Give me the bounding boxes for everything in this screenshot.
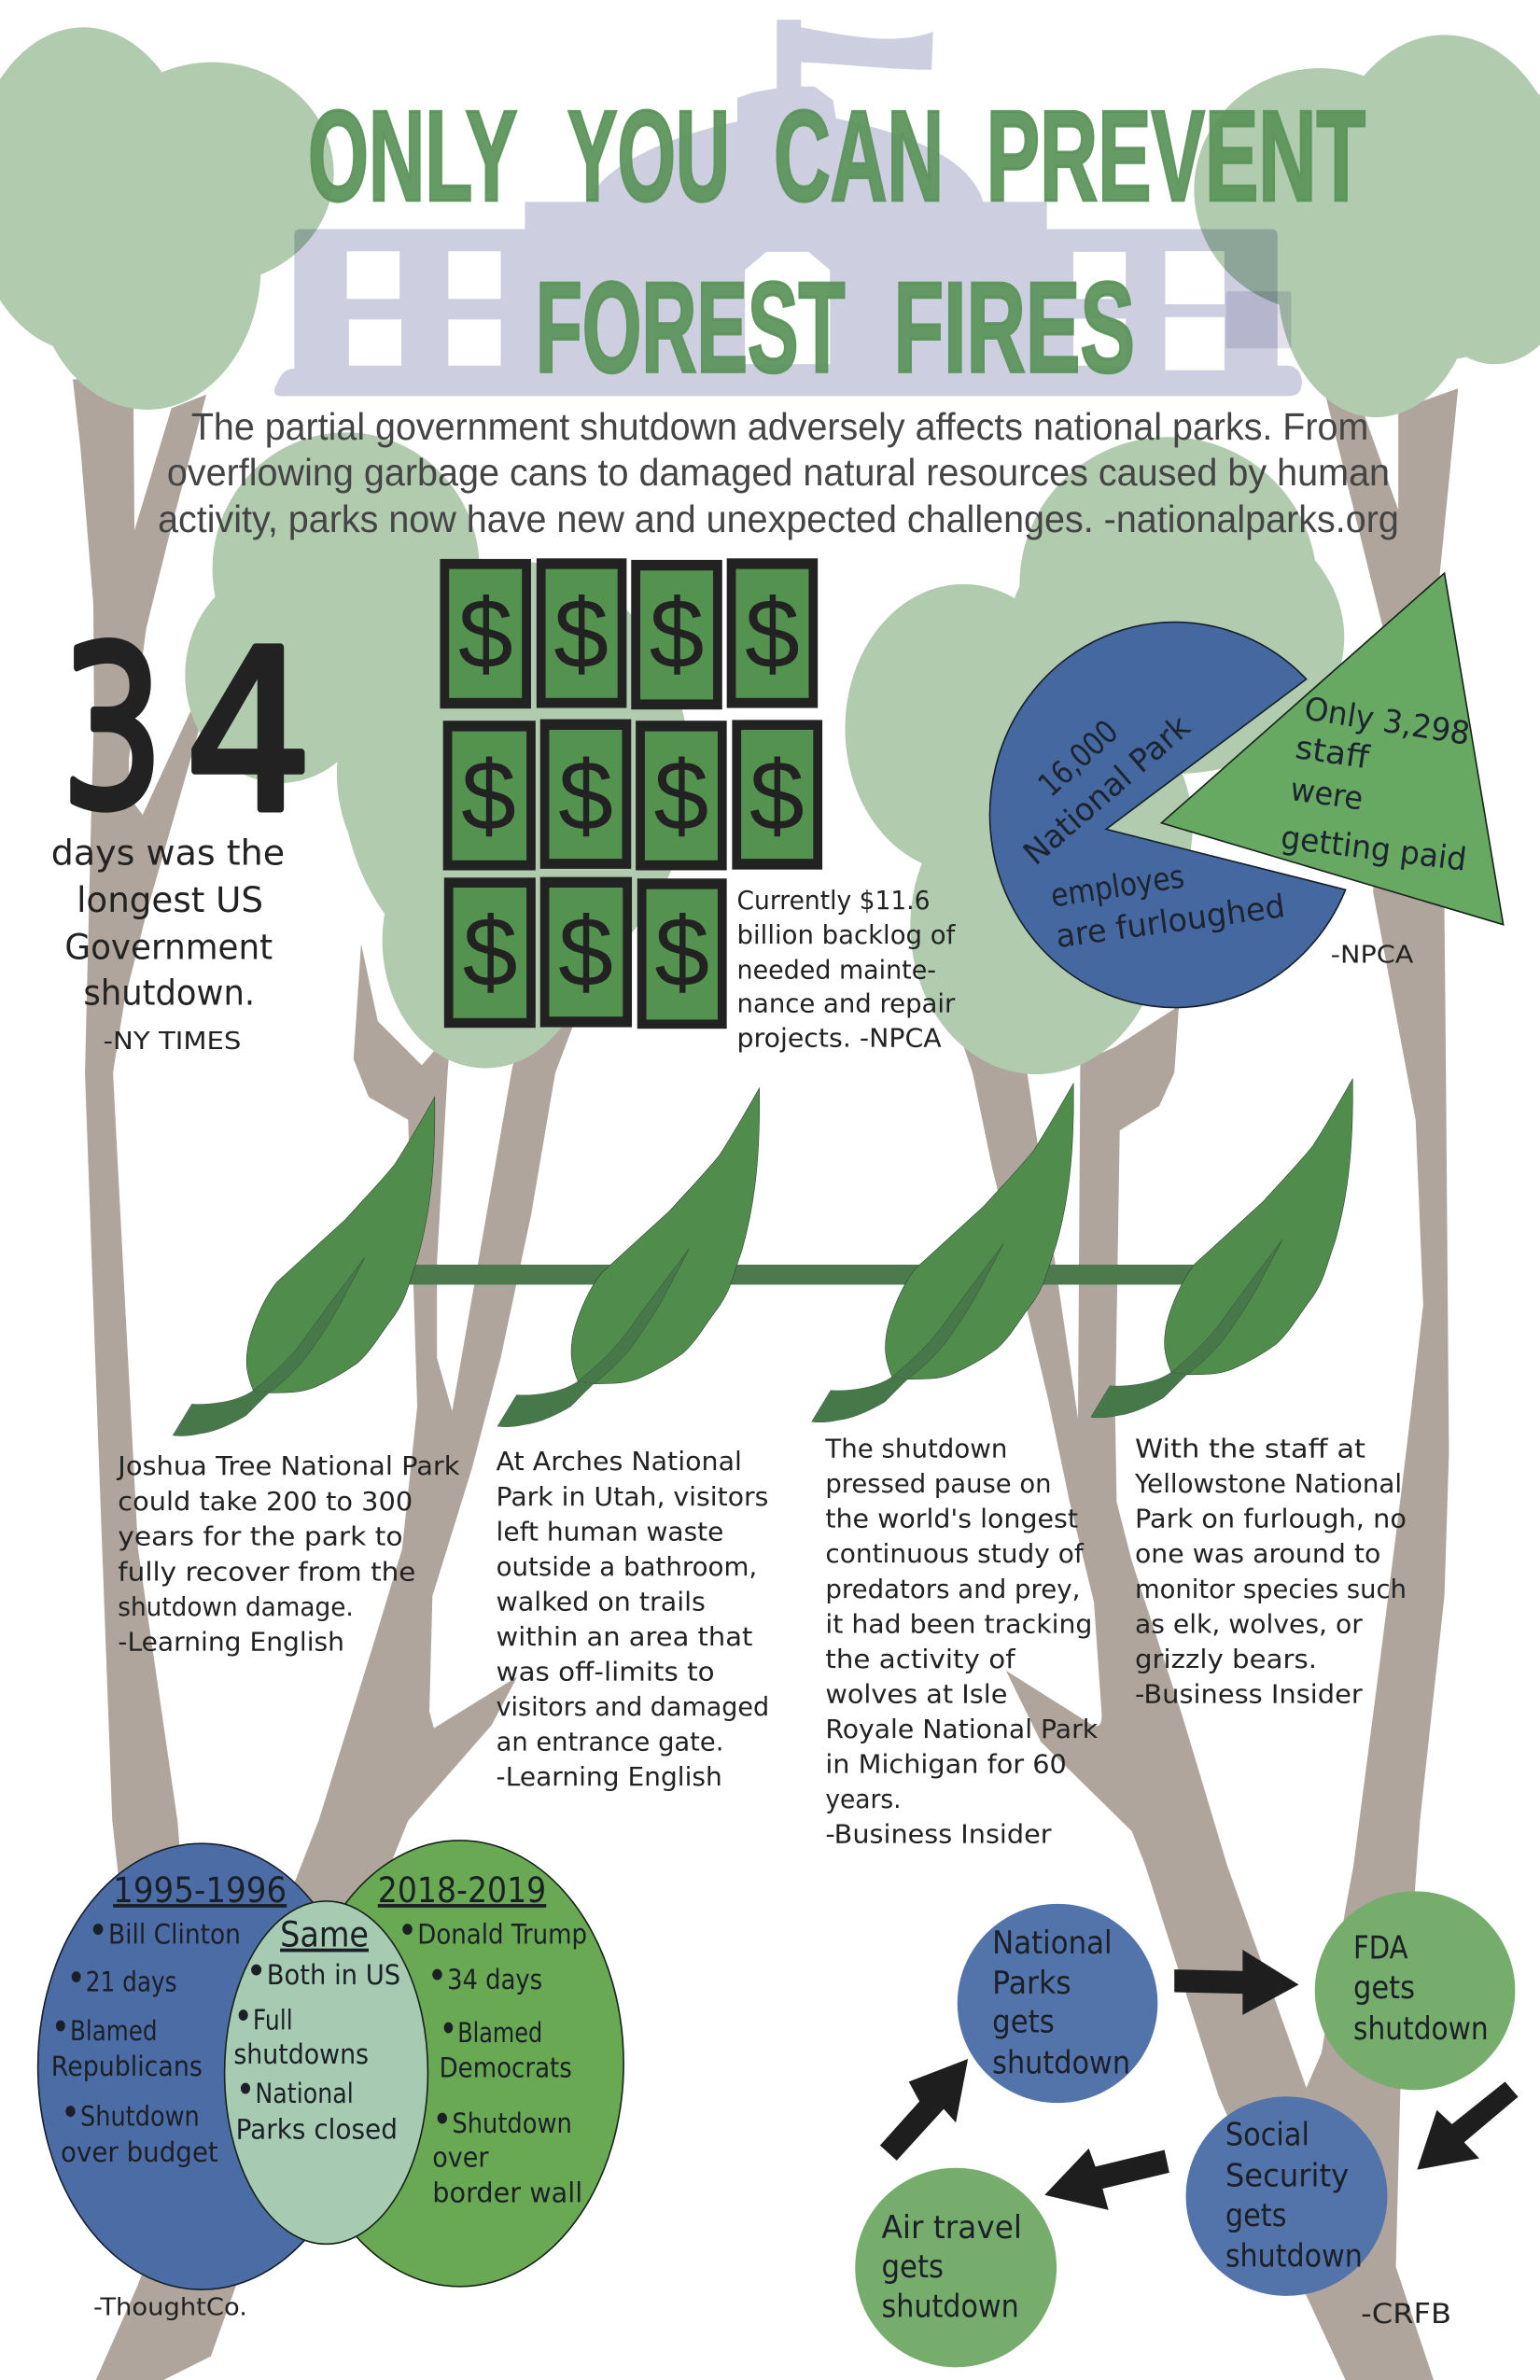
text: Joshua Tree: shutdown damage. — [118, 1591, 354, 1622]
stat caption — [51, 833, 285, 1014]
venn text: 2018-2019: •Donald Trump — [398, 1908, 587, 1953]
node: Air travel: shutdown — [881, 2288, 1019, 2325]
node: Air travel: gets — [881, 2248, 944, 2286]
text: Joshua Tree: years for the park to — [118, 1521, 403, 1552]
arrow: parks to FDA — [1174, 1950, 1299, 2015]
pie label: paid: were — [1288, 771, 1365, 819]
pie label: furloughed: employes — [1048, 858, 1187, 916]
trunk: middle-left tree — [95, 944, 577, 2380]
bill row 3: $ — [558, 898, 613, 1008]
white house silhouette — [274, 20, 1302, 396]
text: Arches: an entrance gate. — [497, 1727, 723, 1757]
backlog caption: nance and repair — [737, 987, 956, 1018]
text: Joshua Tree — [116, 1450, 460, 1658]
pie chart: furloughed staff — [990, 573, 1504, 1008]
intro paragraph — [158, 405, 1399, 540]
foliage: middle-left tree — [185, 432, 691, 1068]
tree trunks — [73, 379, 1458, 2380]
backlog caption — [737, 885, 957, 1054]
venn text: same: •Both in US — [245, 1949, 400, 1994]
text: Isle Royale: the world's longest — [825, 1504, 1078, 1534]
text: Arches: walked on trails — [497, 1586, 706, 1617]
backlog caption: needed mainte- — [737, 955, 936, 986]
title: YOU — [567, 85, 730, 229]
venn circle: 1995-1996 — [38, 1843, 366, 2289]
text: Arches — [497, 1446, 769, 1792]
source: ThoughtCo: -ThoughtCo. — [93, 2294, 247, 2322]
leaf 2 — [497, 1088, 760, 1427]
text: Isle Royale: pressed pause on — [825, 1468, 1052, 1499]
pie label: furloughed — [1016, 708, 1287, 956]
backlog caption: billion backlog of — [737, 919, 957, 950]
bill row 1: $ — [458, 579, 513, 689]
venn text: same: Parks closed — [236, 2113, 398, 2145]
source: CRFB: -CRFB — [1361, 2298, 1451, 2330]
text: Yellowstone: grizzly bears. — [1135, 1644, 1317, 1674]
venn circle: same — [225, 1901, 427, 2244]
bill row 2: $ — [654, 741, 708, 851]
foliage: top-left tree — [0, 27, 334, 410]
text: Arches: was off-limits to — [497, 1657, 715, 1687]
text: Joshua Tree: could take 200 to 300 — [118, 1486, 413, 1517]
stat caption: longest US — [77, 879, 263, 920]
venn text: same: •National — [236, 2067, 354, 2112]
intro paragraph: activity, parks now have new and unexpected challenges. -nationalparks.org — [158, 497, 1399, 540]
venn text: 2018-2019: border wall — [432, 2177, 582, 2208]
text: Isle Royale: years. — [825, 1784, 902, 1814]
node: National Parks: Parks — [992, 1965, 1071, 2002]
dollar bills grid — [440, 558, 822, 1029]
text: Yellowstone: monitor species such — [1135, 1574, 1407, 1604]
venn text: same: •Full — [233, 1995, 293, 2039]
bill row 2 — [443, 720, 822, 870]
node: Social Security: Social — [1225, 2117, 1309, 2154]
text: Arches: Park in Utah, visitors — [497, 1481, 768, 1512]
text: Isle Royale — [824, 1434, 1098, 1850]
pie label: furloughed: National Park — [1016, 708, 1197, 873]
backlog caption: projects. -NPCA — [737, 1023, 942, 1054]
node: Social Security: shutdown — [1225, 2238, 1363, 2275]
arrow: social security to air travel — [1044, 2149, 1169, 2210]
bill row 3 — [444, 877, 727, 1029]
text: Isle Royale: the activity of — [825, 1644, 1016, 1674]
text: Yellowstone: as elk, wolves, or — [1135, 1608, 1363, 1639]
big number 34: 4 — [185, 603, 313, 861]
text: Joshua Tree: fully recover from the — [118, 1556, 415, 1587]
leaf 1 — [173, 1097, 435, 1435]
venn text: 2018-2019: •34 days — [427, 1953, 542, 1998]
venn text: 1995-1996: over budget — [61, 2136, 218, 2168]
text: Isle Royale: Royale National Park — [825, 1714, 1098, 1744]
leaf 4 — [1091, 1079, 1352, 1418]
text: Arches: outside a bathroom, — [497, 1551, 757, 1582]
node: FDA: gets — [1353, 1969, 1415, 2007]
venn text: 2018-2019 — [378, 1869, 587, 2208]
big number 34: 3 — [61, 600, 164, 858]
text: Arches: within an area that — [497, 1621, 752, 1652]
text: Isle Royale: wolves at Isle — [825, 1678, 1007, 1709]
node: National Parks: gets — [992, 2004, 1055, 2041]
stat caption: days was the — [51, 833, 285, 874]
node: Air travel — [855, 2168, 1057, 2367]
text: Joshua Tree: Joshua Tree National Park — [116, 1450, 460, 1481]
bill row 2: $ — [461, 741, 516, 851]
source: NY Times: -NY TIMES — [104, 1028, 241, 1056]
venn text: same — [233, 1914, 400, 2145]
stat: 34 days — [51, 600, 313, 1056]
backlog caption: Currently $11.6 — [737, 885, 931, 916]
node: FDA: FDA — [1353, 1930, 1408, 1967]
intro paragraph: The partial government shutdown adversely affects national parks. From — [191, 405, 1368, 448]
node: FDA: shutdown — [1353, 2010, 1489, 2048]
node: National Parks — [958, 1904, 1157, 2103]
foliage: middle-right tree — [845, 437, 1344, 1074]
text: Isle Royale: -Business Insider — [825, 1819, 1052, 1850]
node: Social Security: Security — [1225, 2158, 1349, 2195]
pie label: paid: getting paid — [1279, 819, 1468, 879]
text: Isle Royale: continuous study of — [825, 1538, 1085, 1569]
branch bar linking leaves — [408, 1265, 1198, 1284]
text: Yellowstone — [1134, 1434, 1407, 1709]
venn text: 1995-1996: 1995-1996 — [113, 1869, 287, 1911]
text: Isle Royale: it had been tracking — [825, 1608, 1092, 1639]
text: Arches: visitors and damaged — [497, 1691, 769, 1722]
big number 34 — [61, 600, 313, 861]
text: Isle Royale: predators and prey, — [825, 1574, 1080, 1604]
pie label: paid — [1279, 690, 1473, 879]
text: Isle Royale: in Michigan for 60 — [825, 1749, 1067, 1780]
title: ONLY — [308, 85, 517, 229]
venn text: 1995-1996: •Shutdown — [61, 2091, 200, 2135]
text: Yellowstone: With the staff at — [1135, 1434, 1365, 1464]
node: Social Security: gets — [1225, 2197, 1287, 2234]
title — [308, 85, 1365, 399]
node: National Parks: National — [992, 1925, 1113, 1962]
text: Arches: -Learning English — [497, 1761, 722, 1792]
text: Yellowstone: one was around to — [1135, 1538, 1380, 1569]
trunk: middle-right tree — [948, 1001, 1434, 2380]
venn text: 2018-2019: Democrats — [440, 2051, 572, 2083]
bill row 1: $ — [745, 579, 800, 689]
node: National Parks: shutdown — [992, 2045, 1130, 2082]
pie label: furloughed: are furloughed — [1054, 888, 1287, 956]
house: tinted square — [1225, 291, 1291, 348]
venn text: 1995-1996: •21 days — [67, 1956, 177, 2001]
cycle diagram: shutdown effects — [855, 1891, 1519, 2367]
venn text: same: shutdowns — [233, 2038, 369, 2070]
pie: furloughed slice — [990, 623, 1346, 1008]
leaf 3 — [812, 1084, 1073, 1422]
title: FIRES — [893, 256, 1135, 399]
pie: paid slice — [1161, 573, 1504, 925]
venn text: 1995-1996: •Blamed — [51, 2005, 158, 2050]
bill row 3: $ — [463, 898, 517, 1008]
node: Air travel: Air travel — [881, 2209, 1022, 2247]
bill row 1 — [440, 558, 818, 709]
tree foliage — [0, 27, 1540, 1074]
bill row 2: $ — [749, 741, 805, 851]
arrow: FDA to social security — [1417, 2081, 1519, 2170]
text: Arches: At Arches National — [497, 1446, 742, 1477]
venn text: 1995-1996: Republicans — [51, 2051, 203, 2082]
text: Yellowstone: Park on furlough, no — [1135, 1504, 1407, 1534]
venn text: 1995-1996: •Bill Clinton — [88, 1908, 241, 1953]
text: Arches: left human waste — [497, 1516, 723, 1547]
text: Isle Royale: The shutdown — [824, 1434, 1007, 1464]
stat caption: shutdown. — [83, 973, 255, 1014]
trunk: right tree — [1307, 388, 1458, 2296]
title: FOREST — [536, 256, 845, 399]
venn text: 1995-1996 — [51, 1869, 287, 2168]
bill row 1: $ — [650, 579, 704, 689]
node: FDA — [1315, 1891, 1515, 2090]
source: NPCA: -NPCA — [1331, 942, 1414, 970]
venn diagram: shutdown comparison — [38, 1841, 623, 2322]
bill row 3: $ — [654, 898, 709, 1008]
venn text: 2018-2019: •Blamed — [440, 2007, 542, 2051]
venn text: 2018-2019: 2018-2019 — [378, 1869, 546, 1911]
venn text: same: Same — [280, 1914, 369, 1955]
bill row 1: $ — [553, 579, 609, 689]
foliage: top-right tree — [1194, 35, 1540, 417]
trunk: left tree — [73, 379, 213, 1972]
venn circle: 2018-2019 — [296, 1841, 623, 2287]
text: Yellowstone: -Business Insider — [1135, 1678, 1363, 1709]
bill row 2: $ — [558, 741, 613, 851]
pie label: paid: staff — [1293, 729, 1373, 777]
stat caption: Government — [64, 926, 273, 967]
intro paragraph: overflowing garbage cans to damaged natural resources caused by human — [167, 451, 1390, 494]
node: Social Security — [1186, 2096, 1387, 2296]
venn text: 2018-2019: •Shutdown — [432, 2097, 572, 2142]
arrow: air travel to parks — [880, 2059, 968, 2161]
text: Yellowstone: Yellowstone National — [1134, 1468, 1402, 1499]
pie label: paid: Only 3,298 — [1302, 690, 1473, 753]
venn text: 2018-2019: over — [432, 2141, 489, 2173]
text: Joshua Tree: -Learning English — [118, 1627, 344, 1658]
pie label: furloughed: 16,000 — [1031, 713, 1126, 805]
title: CAN — [774, 85, 944, 229]
